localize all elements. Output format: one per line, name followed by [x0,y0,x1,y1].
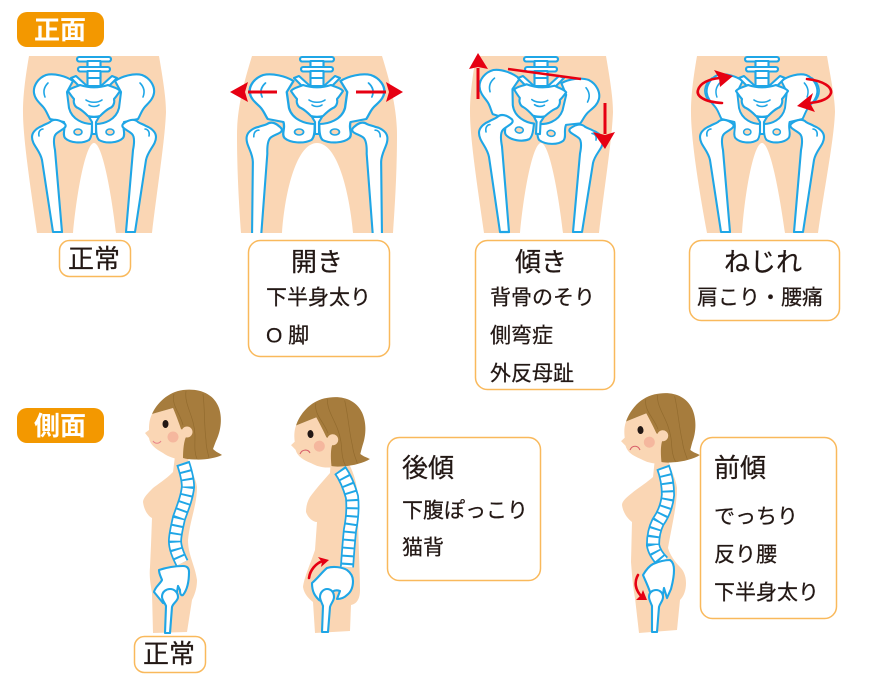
label: 正常 (front): 正常 [68,244,120,274]
panel: front normal pelvis [23,56,166,233]
panel: ねじれ label [690,240,840,320]
panel: 開き label: 下半身太り [266,286,371,310]
panel: 前傾 label: 下半身太り [714,582,819,604]
panel: 開き label [248,240,390,356]
heading tag: 側面: 側面 [34,411,86,441]
mouth: smile [153,441,161,443]
panel: 前傾 label: でっちり [714,506,798,528]
panel: 後傾 label: 猫背 [402,536,444,560]
panel: 後傾 label [388,438,540,580]
label: 正常 (side): 正常 [143,639,195,669]
panel: front twisted pelvis [691,56,835,233]
panel: 開き label: 開き [291,247,343,277]
heading tag: 正面 [17,12,104,47]
panel: 前傾 label: 前傾 [714,453,766,483]
arrow: tilt up [469,53,488,99]
panel: 後傾 label: 後傾 [402,453,454,483]
arrow: outward right [356,82,403,102]
arrow: twist right [797,79,831,112]
panel: ねじれ label: ねじれ [724,247,802,277]
panel: 開き label: O 脚 [266,324,309,348]
heading tag: 正面: 正面 [34,15,86,45]
arrow: twist left [698,70,733,103]
panel: ねじれ label: 肩こり・腰痛 [697,286,823,310]
label: 正常 (front) [60,240,130,276]
label: 正常 (side) [134,636,206,672]
line: hip tilt [508,69,581,79]
panel: 前傾 label: 反り腰 [714,544,777,566]
arrow: posterior rotation [309,557,329,578]
panel: 前傾 label [700,438,836,618]
panel: 傾き label: 側弯症 [490,324,553,348]
arrow: anterior rotation [636,575,647,600]
panel: 傾き label: 背骨のそり [490,286,595,310]
figure: side anterior tilt [617,390,700,633]
heading tag: 側面 [17,408,104,443]
panel: 傾き label [476,240,614,390]
mouth: frown [630,446,640,450]
mouth: frown [300,450,310,454]
panel: front open pelvis [237,56,397,233]
panel: 傾き label: 外反母趾 [490,362,574,386]
figure: side normal [143,390,222,633]
panel: 傾き label: 傾き [515,247,567,277]
figure: side posterior tilt [287,394,370,633]
arrow: tilt down [593,103,615,149]
arrow: outward left [230,82,277,102]
panel: 後傾 label: 下腹ぽっこり [402,500,528,522]
panel: front tilted pelvis [470,56,613,233]
